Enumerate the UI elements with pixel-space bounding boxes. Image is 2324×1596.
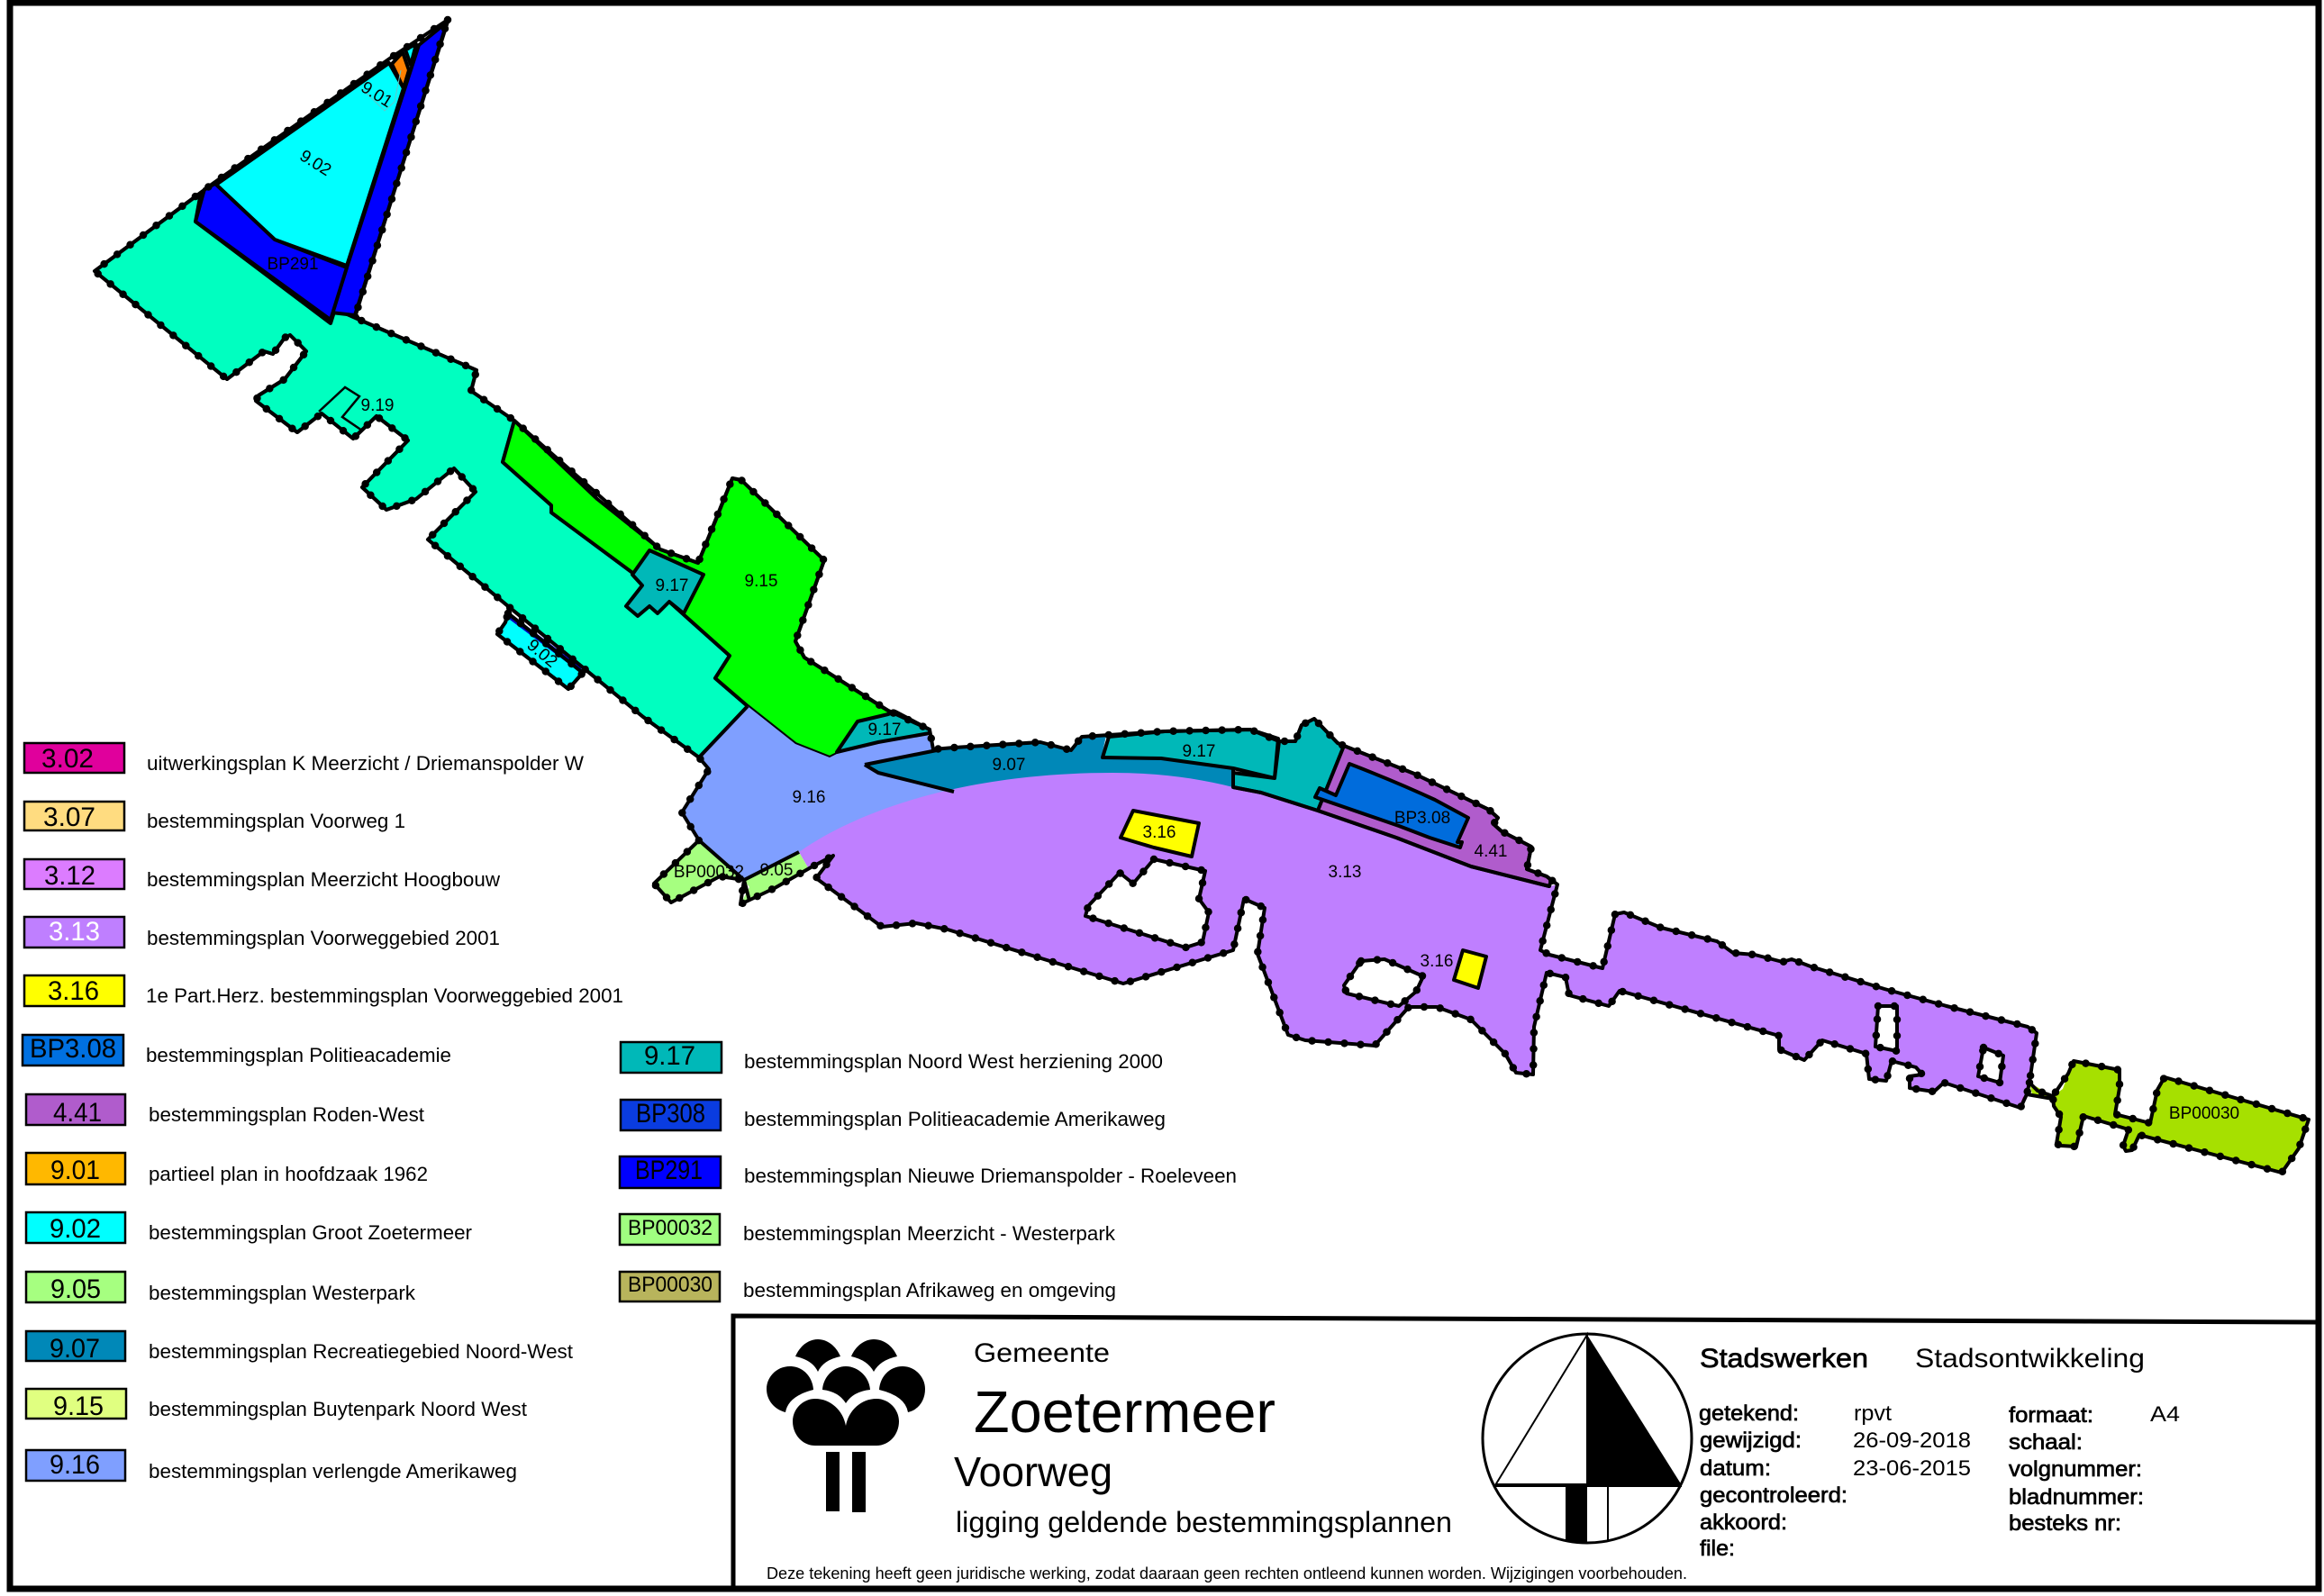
area: 9.16 verlengde Amerikaweg (682, 706, 954, 880)
map: plan areas (95, 20, 2309, 1173)
dotted plan-area outer boundary (95, 20, 2309, 1173)
legend item BP291 (620, 1156, 1237, 1188)
map area labels (267, 78, 2239, 1123)
area: 9.19 Driemanspolder body (95, 193, 748, 757)
legend item 9.05: 9.05 (50, 1274, 101, 1304)
area: 9.02 small sliver (405, 44, 416, 65)
area: 9.05 Westerpark (740, 852, 809, 904)
map area labels: 9.19 (361, 396, 394, 415)
internal plan boundaries (699, 706, 2053, 1099)
area: 9.01 partieel plan (392, 52, 409, 88)
drawing metadata fields: 26-09-2018 (1853, 1428, 1971, 1453)
map area labels: BP00030 (2169, 1104, 2239, 1123)
area: BP3.08 Politieacademie (1315, 764, 1468, 848)
legend item 3.02: uitwerkingsplan K Meerzicht / Driemanspolder W (147, 752, 584, 775)
drawing metadata fields (1699, 1401, 2180, 1561)
legend item 9.01: 9.01 (50, 1156, 100, 1185)
legend item BP00030: BP00030 (628, 1273, 713, 1297)
legend item BP291: BP291 (635, 1156, 703, 1185)
map area labels: 9.17 (656, 576, 688, 595)
legend item 9.05: bestemmingsplan Westerpark (149, 1282, 416, 1304)
legend item 3.16: 3.16 (48, 976, 99, 1006)
label frame: 9.01 (363, 70, 401, 111)
icon: north arrow (1483, 1334, 1692, 1543)
legend item BP00032: bestemmingsplan Meerzicht - Westerpark (743, 1222, 1116, 1245)
municipality heading: Gemeente (974, 1338, 1110, 1368)
legend item BP3.08: BP3.08 (30, 1034, 116, 1064)
legend item 9.17: 9.17 (644, 1041, 695, 1071)
legend item 9.17: bestemmingsplan Noord West herziening 2000 (744, 1050, 1163, 1073)
legend item 9.07: 9.07 (50, 1334, 100, 1364)
title block border (733, 1316, 2319, 1589)
legend item 3.07: bestemmingsplan Voorweg 1 (147, 810, 405, 832)
legend item 4.41: 4.41 (53, 1098, 102, 1128)
area: BP291 lower band (195, 184, 347, 320)
map area labels: 9.07 (993, 756, 1025, 775)
legend item BP308: bestemmingsplan Politieacademie Amerikaweg (744, 1108, 1166, 1130)
legend item BP291: bestemmingsplan Nieuwe Driemanspolder - Roeleveen (744, 1165, 1237, 1187)
legend item 9.02 (26, 1212, 472, 1244)
legend item 9.07: bestemmingsplan Recreatiegebied Noord-West (149, 1340, 573, 1363)
legend item BP00032 (620, 1214, 1116, 1245)
disclaimer: Deze tekening heeft geen juridische werking, zodat daaraan geen rechten ontleend kunnen worden. Wijzigingen voorbehouden. (767, 1564, 1687, 1582)
legend item 9.02: bestemmingsplan Groot Zoetermeer (149, 1221, 472, 1244)
drawing metadata fields: A4 (2150, 1402, 2180, 1427)
project title: Voorweg (954, 1448, 1112, 1495)
map area labels: 9.02 (296, 147, 334, 180)
map area labels: 3.13 (1329, 863, 1361, 882)
legend item 9.01: partieel plan in hoofdzaak 1962 (149, 1163, 428, 1185)
area: 9.15 Buytenpark (503, 421, 930, 757)
drawing metadata fields: volgnummer: (2009, 1457, 2142, 1482)
icon: Zoetermeer tree logo (767, 1339, 925, 1512)
legend item 3.02: 3.02 (41, 744, 94, 774)
drawing metadata fields: gewijzigd: (1700, 1428, 1802, 1453)
area: 9.02 island (497, 613, 583, 689)
legend: right column (620, 1041, 1237, 1301)
area: 9.17 wedge (837, 712, 930, 752)
legend item 9.16: bestemmingsplan verlengde Amerikaweg (149, 1460, 517, 1483)
map area labels: 9.02 (523, 636, 560, 672)
legend item 3.12: 3.12 (44, 861, 95, 891)
legend item 3.13 (24, 917, 500, 949)
drawing metadata fields: schaal: (2009, 1430, 2083, 1455)
area: BP00030 Afrikaweg (2053, 1061, 2309, 1173)
department heading: Stadswerken (1700, 1344, 1868, 1374)
map area labels: 9.17 (868, 721, 901, 739)
legend item 3.13: bestemmingsplan Voorweggebied 2001 (147, 927, 500, 949)
legend item 9.15 (26, 1389, 527, 1421)
legend item 3.12 (24, 859, 500, 891)
drawing metadata fields: 23-06-2015 (1853, 1456, 1971, 1481)
legend: left column (23, 743, 623, 1483)
legend item BP308 (621, 1099, 1166, 1130)
area: BP00030 sliver (2029, 1083, 2053, 1101)
drawing metadata fields: getekend: (1699, 1401, 1799, 1426)
map area labels: BP00032 (674, 863, 744, 882)
drawing metadata fields: besteks nr: (2009, 1511, 2121, 1536)
area: 9.17 east block (1103, 730, 1278, 778)
legend item 3.07 (24, 802, 405, 832)
legend item 4.41 (26, 1094, 424, 1128)
legend item BP3.08 (23, 1034, 451, 1066)
legend item 9.15: bestemmingsplan Buytenpark Noord West (149, 1398, 527, 1420)
area: 9.19 inner outline (319, 387, 362, 431)
legend item 9.01 (26, 1153, 428, 1185)
legend item 3.02 (24, 743, 584, 775)
area: 3.16 yellow north (1121, 811, 1199, 857)
area: BP291 (331, 22, 448, 315)
map area labels: 9.01 (358, 78, 395, 112)
legend item BP00030: bestemmingsplan Afrikaweg en omgeving (743, 1279, 1116, 1301)
legend item 3.12: bestemmingsplan Meerzicht Hoogbouw (147, 868, 500, 891)
legend item BP00030 (620, 1272, 1116, 1301)
map area labels: 9.17 (1183, 742, 1215, 761)
map area labels: BP291 (267, 255, 319, 274)
legend item 3.16 (24, 975, 623, 1007)
legend item BP3.08: bestemmingsplan Politieacademie (146, 1044, 451, 1066)
drawing metadata fields: akkoord: (1700, 1510, 1787, 1535)
department unit: Stadsontwikkeling (1915, 1344, 2145, 1374)
area: 3.02 trace (2020, 1097, 2024, 1106)
legend item 9.17 (621, 1041, 1163, 1073)
area: 9.17 east corner (1233, 719, 1344, 811)
drawing metadata fields: rpvt (1854, 1401, 1892, 1426)
legend item BP00032: BP00032 (628, 1216, 713, 1240)
legend item BP308: BP308 (636, 1099, 705, 1129)
drawing metadata fields: file: (1700, 1537, 1735, 1561)
map area labels: 3.16 (1143, 823, 1176, 842)
legend item 9.07 (26, 1331, 573, 1364)
area: 4.41 Roden-West (1318, 746, 1551, 886)
legend item 3.07: 3.07 (43, 803, 95, 832)
area: 9.02 Groot Zoetermeer (216, 63, 404, 266)
map area labels: 4.41 (1475, 842, 1507, 861)
area: BP00032 Meerzicht-Westerpark (654, 840, 744, 902)
drawing metadata fields: datum: (1700, 1456, 1771, 1481)
drawing metadata fields: formaat: (2009, 1403, 2093, 1428)
map area labels: BP3.08 (1394, 809, 1450, 828)
subtitle: ligging geldende bestemmingsplannen (956, 1506, 1452, 1538)
municipality name: Zoetermeer (974, 1379, 1275, 1445)
legend item 9.02: 9.02 (50, 1214, 101, 1244)
area: 3.13 Voorweggebied (799, 773, 2037, 1108)
area: island sliver (510, 614, 582, 671)
drawing metadata fields: bladnummer: (2009, 1485, 2144, 1510)
title block (733, 1316, 2319, 1589)
map area labels: 9.15 (745, 572, 777, 591)
legend item 9.05 (26, 1272, 416, 1304)
legend item 9.16: 9.16 (50, 1450, 100, 1480)
map area labels: 9.16 (793, 788, 825, 807)
legend item 3.16: 1e Part.Herz. bestemmingsplan Voorweggebied 2001 (146, 984, 623, 1007)
area: 9.07 Recreatiegebied (865, 736, 1233, 811)
legend item 9.15: 9.15 (53, 1392, 104, 1421)
area: 3.16 yellow south (1454, 950, 1486, 988)
map area labels: 9.05 (760, 861, 793, 880)
area: 9.17 west block (626, 550, 704, 616)
drawing metadata fields: gecontroleerd: (1700, 1483, 1847, 1508)
map area labels: 3.16 (1421, 952, 1453, 971)
legend item 9.16 (26, 1450, 517, 1483)
legend item 4.41: bestemmingsplan Roden-West (149, 1103, 424, 1126)
legend item 3.13: 3.13 (49, 917, 100, 947)
